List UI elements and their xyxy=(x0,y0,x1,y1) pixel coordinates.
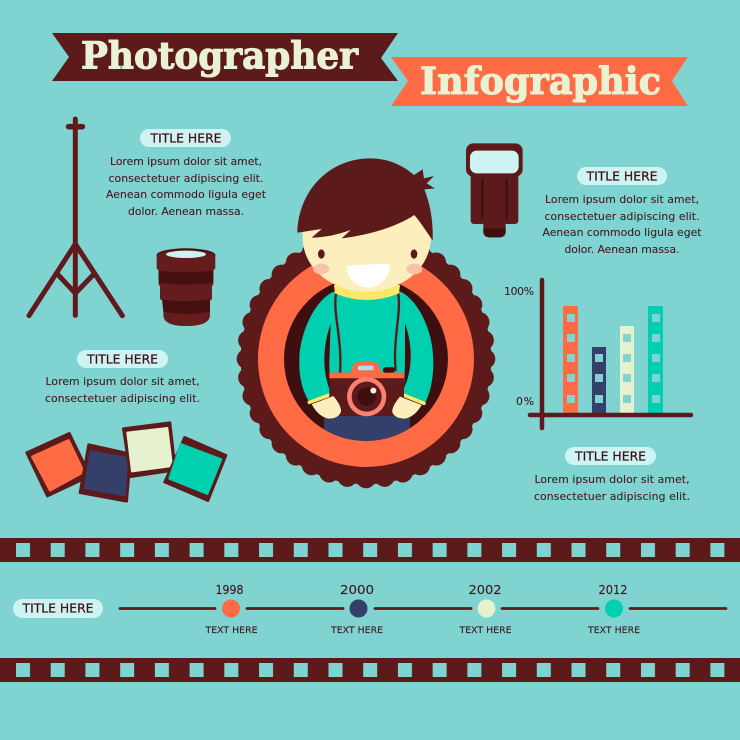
chart axes xyxy=(530,280,691,428)
text block: top right xyxy=(542,167,702,256)
milestone 1998: TEXT HERE xyxy=(204,625,258,636)
y axis labels: 0% xyxy=(516,395,534,408)
photo: cream xyxy=(123,423,175,477)
film strip: bottom xyxy=(0,658,740,682)
milestone 1998 xyxy=(204,583,258,636)
photo: navy xyxy=(80,445,131,501)
sweater xyxy=(299,292,433,413)
bar: cream xyxy=(620,326,634,415)
title banner: Infographic: Infographic xyxy=(420,59,661,103)
cheeks xyxy=(313,264,422,274)
text block: top right: TITLE HERE xyxy=(585,170,658,184)
text block: top left: Aenean commodo ligula eget xyxy=(106,188,266,201)
milestone 2000: 2000 xyxy=(340,583,374,597)
hands xyxy=(312,396,422,419)
milestone 1998: 1998 xyxy=(216,583,244,597)
collar xyxy=(334,285,400,300)
text block: middle left: Lorem ipsum dolor sit amet, xyxy=(46,375,200,388)
bar: navy xyxy=(592,347,606,415)
inner dark circle xyxy=(284,277,448,441)
icon: camera lens xyxy=(157,248,215,326)
timeline xyxy=(13,583,726,636)
text block: top right: dolor. Aenean massa. xyxy=(564,243,680,256)
text block: bottom right: consectetuer adipiscing elit. xyxy=(534,490,690,503)
face xyxy=(303,210,431,292)
bar chart xyxy=(504,280,691,428)
y axis labels xyxy=(504,285,534,408)
y axis labels: 100% xyxy=(504,285,534,298)
icon: stack of photos xyxy=(27,423,226,501)
text block: bottom right: Lorem ipsum dolor sit amet, xyxy=(534,473,690,486)
camera straps xyxy=(335,294,399,374)
milestone 2002: 2002 xyxy=(468,583,502,597)
text block: top left: consectetuer adipiscing elit. xyxy=(108,172,264,185)
jeans xyxy=(324,416,410,441)
text block: top left: dolor. Aenean massa. xyxy=(128,205,244,218)
smile xyxy=(347,264,390,288)
camera xyxy=(329,362,404,416)
timeline line segments xyxy=(120,607,726,610)
milestone 2000 xyxy=(330,583,383,636)
arm gaps xyxy=(324,323,411,391)
photo: orange xyxy=(27,433,90,496)
text block: top right: Aenean commodo ligula eget xyxy=(542,226,702,239)
text block: middle left xyxy=(45,350,200,405)
film strip: top xyxy=(0,538,740,562)
milestone 2012 xyxy=(587,583,640,636)
milestone 2000: TEXT HERE xyxy=(330,625,383,636)
icon: camera flash xyxy=(466,143,523,237)
scalloped badge xyxy=(241,234,491,484)
milestone 2012: 2012 xyxy=(598,583,628,597)
text block: top left xyxy=(106,129,266,218)
photo: teal xyxy=(165,437,226,501)
text block: top right: consectetuer adipiscing elit. xyxy=(544,210,700,223)
text block: top left: TITLE HERE xyxy=(149,132,222,146)
bar: orange xyxy=(563,306,578,415)
sleeve cuffs xyxy=(309,394,424,403)
milestone 2002 xyxy=(458,583,512,636)
eyes xyxy=(318,249,417,259)
timeline title xyxy=(13,599,103,618)
icon: light tripod xyxy=(29,119,122,316)
text block: bottom right xyxy=(534,447,690,503)
text block: top right: Lorem ipsum dolor sit amet, xyxy=(545,193,699,206)
orange ring xyxy=(258,251,474,467)
central badge with photographer character xyxy=(241,158,491,484)
timeline title: TITLE HERE xyxy=(21,602,94,616)
text block: middle left: consectetuer adipiscing elit. xyxy=(45,392,200,405)
text block: middle left: TITLE HERE xyxy=(86,352,158,366)
title banner: Photographer: Photographer xyxy=(81,34,358,78)
milestone 2002: TEXT HERE xyxy=(458,625,512,636)
text block: top left: Lorem ipsum dolor sit amet, xyxy=(110,155,262,168)
milestone 2012: TEXT HERE xyxy=(587,625,640,636)
hair xyxy=(297,158,435,241)
bar: teal xyxy=(648,306,663,415)
text block: bottom right: TITLE HERE xyxy=(574,450,646,464)
